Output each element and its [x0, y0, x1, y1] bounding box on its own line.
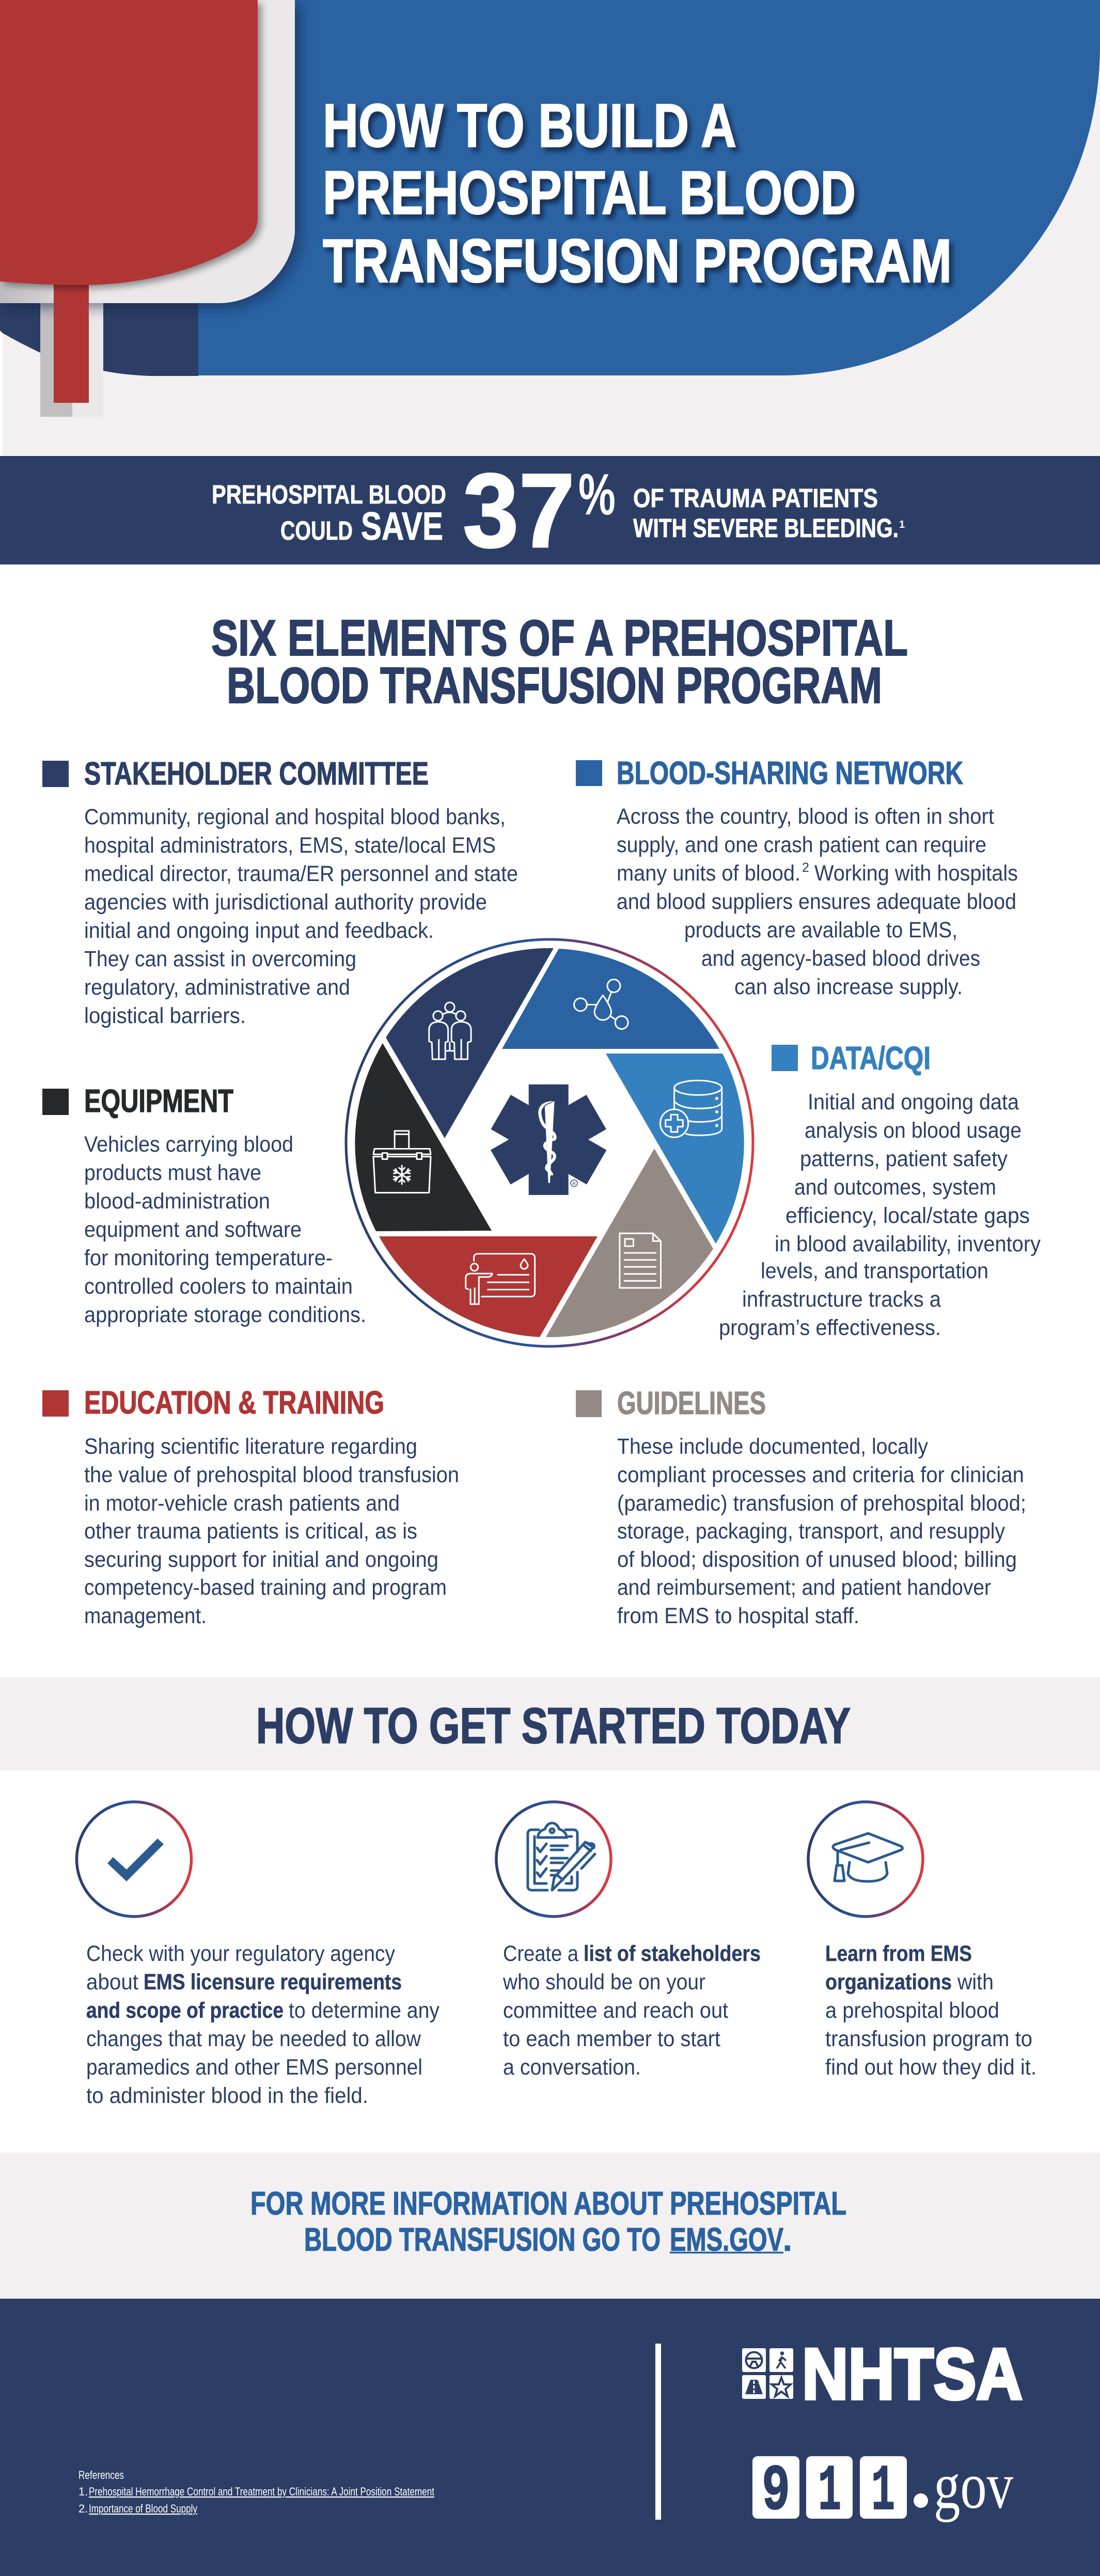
wheel diagram: [346, 939, 753, 1346]
panel: stakeholder committee: Community, regional and hospital blood banks,: [84, 805, 506, 829]
panel: stakeholder committee: agencies with jurisdictional authority provide: [84, 890, 487, 915]
panel: data/cqi: patterns, patient safety: [800, 1146, 1008, 1171]
panel: blood-sharing network: and blood suppliers ensures adequate blood: [617, 889, 1016, 914]
step 1: check regulatory agency: to determine any: [289, 1998, 439, 2023]
panel: blood-sharing network: 2: [802, 860, 809, 875]
step 1: check regulatory agency: changes that may be needed to allow: [86, 2027, 421, 2051]
stat band: OF TRAUMA PATIENTS: [633, 483, 878, 513]
blood bag outlet tube: [54, 279, 89, 403]
references: 2.: [78, 2502, 88, 2515]
segment: guidelines: [546, 1149, 713, 1337]
panel: education and training: competency-based training and program: [84, 1575, 447, 1600]
title: PREHOSPITAL BLOOD: [323, 159, 856, 227]
wheel icons: [373, 980, 722, 1304]
references: Importance of Blood Supply: [89, 2502, 197, 2515]
panel: guidelines: storage, packaging, transport, and resupply: [617, 1519, 1005, 1544]
stat band: WITH SEVERE BLEEDING.: [633, 513, 899, 543]
panel: blood-sharing network: supply, and one crash patient can require: [617, 833, 986, 857]
call to action band: EMS.GOV: [670, 2222, 783, 2258]
panel: equipment: Vehicles carrying blood: [84, 1132, 293, 1157]
panel: data/cqi: infrastructure tracks a: [742, 1287, 941, 1312]
header blue shape: [196, 0, 1100, 375]
references: [78, 2469, 434, 2515]
icon: star of life: [491, 1085, 606, 1195]
section title: six elements: [211, 609, 908, 714]
panel: equipment: appropriate storage conditions.: [84, 1302, 366, 1327]
references: References: [78, 2469, 124, 2481]
panel: data/cqi: levels, and transportation: [761, 1259, 988, 1283]
panel: education and training: Sharing scientific literature regarding: [84, 1434, 417, 1459]
panel: education and training: in motor-vehicle crash patients and: [84, 1491, 400, 1516]
panel: guidelines: [576, 1386, 1026, 1628]
title: HOW TO BUILD A: [323, 91, 736, 160]
panel: data/cqi: analysis on blood usage: [805, 1118, 1022, 1143]
icon: presenter: [466, 1254, 535, 1304]
step 3: learn from ems organizations: transfusion program to: [825, 2027, 1032, 2051]
section title: six elements: BLOOD TRANSFUSION PROGRAM: [227, 657, 882, 714]
panel: data/cqi: Initial and ongoing data: [808, 1090, 1019, 1114]
panel: education and training: other trauma patients is critical, as is: [84, 1519, 417, 1544]
panel: blood-sharing network: products are available to EMS,: [684, 918, 957, 943]
panel: guidelines: from EMS to hospital staff.: [617, 1604, 859, 1628]
panel: equipment: blood-administration: [84, 1189, 270, 1214]
logo: 911.gov: [752, 2449, 1013, 2528]
step 3: learn from ems organizations: find out how they did it.: [825, 2055, 1036, 2080]
step 1: check regulatory agency: EMS licensure requirements: [144, 1970, 402, 1994]
segment: blood-sharing: [502, 949, 719, 1049]
call to action band: FOR MORE INFORMATION ABOUT PREHOSPITAL: [250, 2186, 846, 2222]
panel: stakeholder committee: [42, 756, 518, 1028]
step 1: check regulatory agency: [76, 1802, 439, 2108]
section title: six elements: SIX ELEMENTS OF A PREHOSPITAL: [211, 609, 908, 666]
stat band: %: [578, 462, 616, 527]
step 2: list of stakeholders: who should be on your: [502, 1970, 705, 1994]
segment: equipment: [355, 1043, 492, 1231]
step 1: check regulatory agency: to administer blood in the field.: [86, 2083, 368, 2108]
call to action band: BLOOD TRANSFUSION GO TO: [304, 2222, 661, 2258]
panel: blood-sharing network: BLOOD-SHARING NETWORK: [617, 756, 963, 791]
panel: blood-sharing network: Working with hospitals: [814, 861, 1018, 886]
panel: equipment: [42, 1083, 366, 1327]
banner: how to get started today: [0, 1677, 1100, 1770]
logo: 911.gov: 1: [871, 2455, 895, 2528]
panel: education and training: securing support for initial and ongoing: [84, 1547, 438, 1572]
banner: how to get started today: HOW TO GET STARTED TODAY: [256, 1698, 851, 1754]
call to action band: [0, 2153, 1100, 2299]
header panel: [0, 0, 1100, 456]
stat band: 1: [899, 519, 905, 530]
step 1: check regulatory agency: paramedics and other EMS personnel: [86, 2055, 422, 2080]
title: TRANSFUSION PROGRAM: [323, 227, 952, 295]
icon: star of life: R: [572, 1181, 576, 1186]
panel: blood-sharing network: can also increase supply.: [734, 975, 963, 999]
icon: checkmark in circle: [76, 1802, 191, 1917]
panel: data/cqi: [719, 1041, 1041, 1340]
panel: data/cqi: and outcomes, system: [794, 1175, 996, 1200]
panel: stakeholder committee: STAKEHOLDER COMMITTEE: [84, 756, 429, 792]
panel: data/cqi: efficiency, local/state gaps: [785, 1203, 1030, 1228]
logo: 911.gov: 9: [762, 2455, 790, 2528]
panel: stakeholder committee: hospital administrators, EMS, state/local EMS: [84, 833, 496, 858]
panel: guidelines: GUIDELINES: [617, 1386, 766, 1421]
panel: education and training: the value of prehospital blood transfusion: [84, 1463, 459, 1487]
panel: stakeholder committee: initial and ongoing input and feedback.: [84, 918, 434, 943]
icon: database: [660, 1080, 722, 1137]
logo: NHTSA: NHTSA: [802, 2333, 1023, 2414]
panel: education and training: EDUCATION & TRAINING: [84, 1385, 384, 1421]
icon: clipboard in circle: [496, 1802, 611, 1917]
panel: blood-sharing network: and agency-based blood drives: [701, 946, 980, 971]
step 1: check regulatory agency: Check with your regulatory agency: [86, 1941, 395, 1966]
stat band: 37: [463, 452, 575, 570]
step 3: learn from ems organizations: [808, 1802, 1036, 2080]
panel: stakeholder committee: They can assist in overcoming: [84, 947, 356, 971]
step 2: list of stakeholders: list of stakeholders: [584, 1941, 761, 1966]
call to action band: .: [783, 2222, 792, 2258]
logo: 911.gov: gov: [934, 2449, 1013, 2522]
header navy shape: [0, 155, 198, 376]
icon: blood network: [574, 980, 628, 1029]
panel: equipment: equipment and software: [84, 1217, 302, 1242]
icon: people: [429, 1002, 471, 1059]
references: Prehospital Hemorrhage Control and Treatment by Clinicians: A Joint Position Statement: [89, 2485, 434, 2498]
stat band: PREHOSPITAL BLOOD: [212, 480, 446, 509]
panel: blood-sharing network: [576, 756, 1018, 999]
panel: data/cqi: program’s effectiveness.: [719, 1315, 941, 1340]
stat band: COULD: [280, 516, 353, 545]
icon: mortarboard in circle: [808, 1802, 923, 1917]
segment: stakeholder: [386, 948, 554, 1138]
step 3: learn from ems organizations: with: [957, 1970, 994, 1994]
step 2: list of stakeholders: Create a: [503, 1941, 578, 1966]
stat band: SAVE: [361, 505, 443, 548]
panel: stakeholder committee: medical director, trauma/ER personnel and state: [84, 861, 518, 886]
panel: education and training: management.: [84, 1604, 207, 1628]
panel: guidelines: and reimbursement; and patient handover: [617, 1575, 991, 1600]
panel: stakeholder committee: regulatory, administrative and: [84, 975, 350, 1000]
logo: 911.gov: 1: [818, 2455, 841, 2528]
step 2: list of stakeholders: [496, 1802, 761, 2080]
step 2: list of stakeholders: to each member to start: [503, 2027, 720, 2051]
step 3: learn from ems organizations: a prehospital blood: [825, 1998, 999, 2023]
step 2: list of stakeholders: committee and reach out: [503, 1998, 728, 2023]
segment: education: [379, 1236, 598, 1337]
blood bag outer: [0, 0, 295, 303]
icon: document: [620, 1233, 661, 1288]
icon: cooler: [373, 1131, 431, 1193]
step 1: check regulatory agency: and scope of practice: [86, 1998, 284, 2023]
panel: guidelines: of blood; disposition of unused blood; billing: [617, 1547, 1017, 1572]
panel: equipment: for monitoring temperature-: [84, 1246, 333, 1270]
panel: guidelines: (paramedic) transfusion of prehospital blood;: [617, 1491, 1026, 1516]
panel: guidelines: compliant processes and criteria for clinician: [617, 1463, 1024, 1487]
panel: data/cqi: DATA/CQI: [811, 1041, 931, 1076]
footer: [0, 2299, 1100, 2576]
step 3: learn from ems organizations: organizations: [825, 1970, 952, 1994]
segment: data: [606, 1054, 744, 1244]
title: [323, 91, 952, 295]
stat band: [0, 452, 1100, 570]
references: 1.: [78, 2485, 88, 2498]
panel: blood-sharing network: Across the country, blood is often in short: [617, 804, 994, 829]
panel: equipment: products must have: [84, 1160, 261, 1185]
panel: blood-sharing network: many units of blood.: [617, 861, 800, 886]
panel: education and training: [42, 1385, 459, 1628]
panel: equipment: controlled coolers to maintain: [84, 1274, 353, 1299]
step 2: list of stakeholders: a conversation.: [503, 2055, 641, 2080]
step 1: check regulatory agency: about: [86, 1970, 138, 1994]
panel: equipment: EQUIPMENT: [84, 1083, 233, 1119]
panel: guidelines: These include documented, locally: [617, 1434, 928, 1459]
panel: stakeholder committee: logistical barriers.: [84, 1003, 246, 1028]
step 3: learn from ems organizations: Learn from EMS: [825, 1941, 972, 1966]
blood bag red fill: [0, 0, 258, 285]
panel: data/cqi: in blood availability, inventory: [775, 1232, 1041, 1256]
blood bag tube housing: [40, 289, 103, 417]
